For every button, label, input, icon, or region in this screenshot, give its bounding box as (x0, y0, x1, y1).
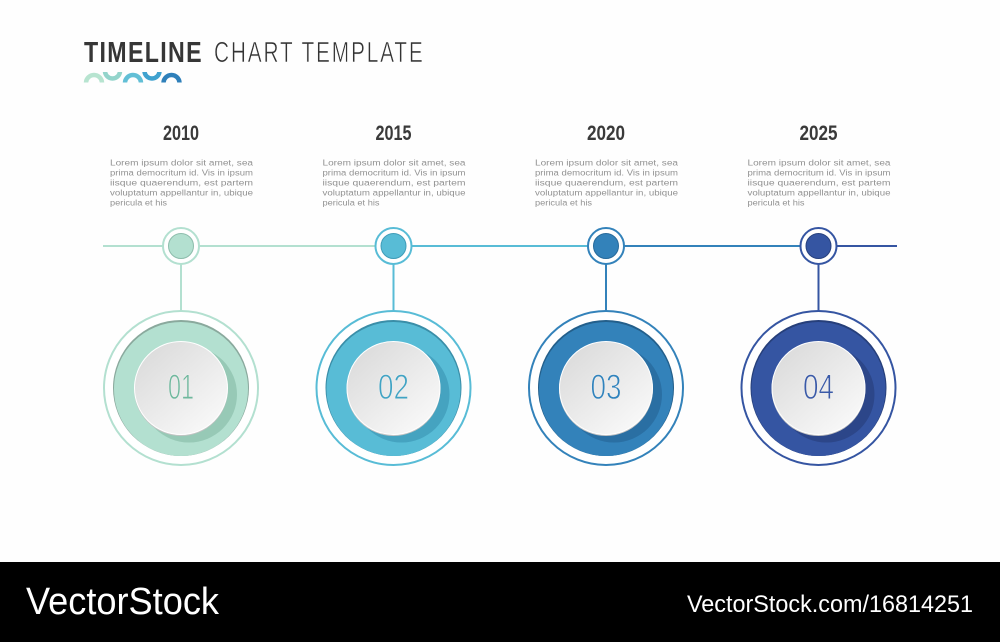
description 2025: prima democritum id. Vis in ipsum (748, 168, 891, 178)
description 2010: pericula et his (110, 198, 167, 208)
node 2010 (163, 228, 199, 264)
node 2025 (800, 228, 836, 264)
year 2010: 2010 (163, 122, 199, 145)
year 2020: 2020 (587, 122, 625, 145)
badge 02: 02 (378, 368, 409, 407)
description 2020: pericula et his (535, 198, 592, 208)
title: CHART TEMPLATE (214, 37, 423, 69)
column: 2015 (316, 122, 470, 465)
badge 01 (104, 311, 258, 465)
column: 2010 (104, 122, 258, 465)
description 2025: iisque quaerendum, est partem (748, 178, 891, 188)
node 2020 (588, 228, 624, 264)
description 2025: Lorem ipsum dolor sit amet, sea (748, 158, 891, 168)
description 2015 (322, 158, 466, 208)
description 2025: pericula et his (748, 198, 804, 208)
year 2015: 2015 (376, 122, 412, 145)
description 2015: Lorem ipsum dolor sit amet, sea (322, 158, 466, 168)
description 2010: iisque quaerendum, est partem (110, 178, 253, 188)
description 2015: iisque quaerendum, est partem (322, 178, 466, 188)
description 2015: voluptatum appellantur in, ubique (322, 188, 466, 198)
badge 02 (316, 311, 470, 465)
description 2010 (110, 158, 254, 208)
connector 2025 (818, 264, 820, 311)
badge 01: 01 (168, 368, 194, 407)
description 2025: voluptatum appellantur in, ubique (748, 188, 891, 198)
footer url: VectorStock.com/16814251 (687, 591, 973, 618)
description 2020: iisque quaerendum, est partem (535, 178, 678, 188)
description 2020: Lorem ipsum dolor sit amet, sea (535, 158, 679, 168)
badge 03: 03 (590, 368, 622, 407)
badge 04 (742, 311, 896, 465)
description 2010: prima democritum id. Vis in ipsum (110, 168, 253, 178)
title: TIMELINE (84, 35, 202, 69)
description 2020 (535, 158, 679, 208)
footer logo text: VectorStock (26, 581, 220, 623)
timeline line (103, 245, 897, 247)
connector 2020 (605, 264, 607, 311)
badge 03 (529, 311, 683, 465)
description 2010: voluptatum appellantur in, ubique (110, 188, 254, 198)
year 2025: 2025 (800, 122, 838, 145)
column: 2025 (742, 122, 896, 465)
title (84, 35, 423, 69)
description 2025 (748, 158, 891, 208)
description 2015: prima democritum id. Vis in ipsum (322, 168, 466, 178)
node 2015 (376, 228, 412, 264)
column: 2020 (529, 122, 683, 465)
badge 04: 04 (803, 368, 834, 407)
description 2010: Lorem ipsum dolor sit amet, sea (110, 158, 254, 168)
description 2020: prima democritum id. Vis in ipsum (535, 168, 678, 178)
connector 2010 (180, 264, 182, 311)
description 2020: voluptatum appellantur in, ubique (535, 188, 679, 198)
connector 2015 (392, 264, 394, 311)
footer bar (0, 562, 1000, 642)
description 2015: pericula et his (322, 198, 380, 208)
title wave decoration (86, 71, 180, 83)
